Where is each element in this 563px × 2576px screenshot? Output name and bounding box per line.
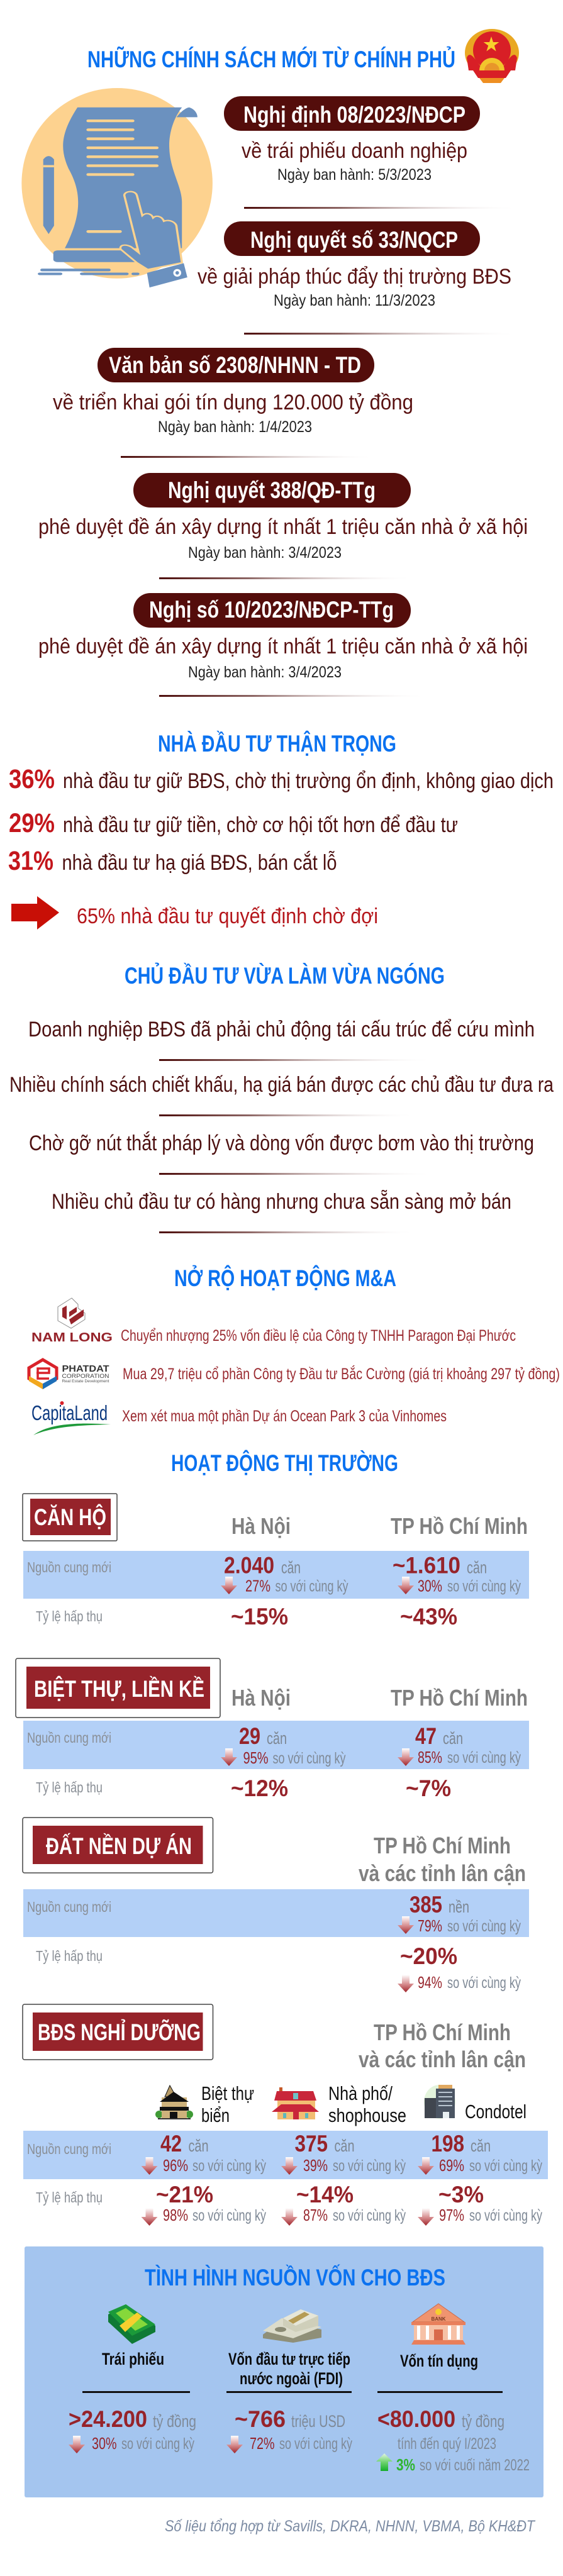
- panel: villas and townhouses: ~7%: [406, 1775, 451, 1801]
- panel: resort property: căn: [335, 2136, 355, 2155]
- panel: resort property: ~14%: [296, 2182, 354, 2207]
- panel: resort property: 97%: [439, 2206, 464, 2224]
- panel: resort property: ~3%: [438, 2182, 484, 2207]
- logo: Nam Long: NAM LONG: [31, 1331, 113, 1345]
- panel: project land: Nguồn cung mới: [27, 1899, 111, 1915]
- icon: beach villa: [155, 2085, 193, 2119]
- policy: decree 08/2023: Ngày ban hành: 5/3/2023: [277, 166, 432, 184]
- column: credit: [376, 2351, 530, 2474]
- panel: apartments: Nguồn cung mới: [27, 1559, 111, 1575]
- policy: decree 10/2023: Nghị số 10/2023/NĐCP-TTg: [149, 597, 394, 623]
- label: condotel: Condotel: [465, 2101, 527, 2123]
- panel: resort property: 87%: [303, 2206, 328, 2224]
- panel: apartments: so với cùng kỳ: [276, 1577, 348, 1595]
- heading: cautious investors: NHÀ ĐẦU TƯ THẬN TRỌNG: [158, 730, 396, 757]
- panel: resort property: so với cùng kỳ: [333, 2157, 406, 2175]
- policy: decree 08/2023: về trái phiếu doanh nghiệp: [242, 139, 467, 163]
- panel: villas and townhouses: Tỷ lệ hấp thụ: [36, 1779, 103, 1796]
- panel: apartments: 2.040: [224, 1552, 274, 1579]
- column: FDI: so với cùng kỳ: [279, 2435, 352, 2453]
- column: bonds: Trái phiếu: [102, 2350, 164, 2368]
- panel: project land: 79%: [418, 1916, 442, 1935]
- panel: apartments: Tỷ lệ hấp thụ: [36, 1608, 103, 1624]
- icon: green banknotes: [108, 2304, 155, 2344]
- column: credit: Vốn tín dụng: [400, 2351, 478, 2370]
- heading: capital sources: TÌNH HÌNH NGUỒN VỐN CHO BĐS: [145, 2264, 445, 2290]
- panel: project land: 94%: [418, 1973, 442, 1992]
- panel: resort property: so với cùng kỳ: [333, 2207, 406, 2224]
- panel: apartments: so với cùng kỳ: [447, 1577, 521, 1595]
- panel: villas and townhouses: Hà Nội: [231, 1685, 291, 1711]
- panel: project land: nền: [449, 1897, 469, 1916]
- column: FDI: [226, 2350, 352, 2453]
- policy: document 2308: [53, 348, 413, 436]
- panel: resort property: 39%: [303, 2156, 328, 2175]
- panel: resort property: 42: [160, 2131, 182, 2157]
- policy: resolution 388: [38, 473, 528, 562]
- panel: resort property: 96%: [163, 2156, 188, 2175]
- arrow: conclusion: [11, 896, 59, 930]
- panel: villas and townhouses: Nguồn cung mới: [27, 1729, 111, 1746]
- stat: 29 percent: 29%: [9, 808, 55, 838]
- logo: Phat Dat: [29, 1360, 109, 1389]
- logo: Phat Dat: PHATDAT: [62, 1363, 109, 1374]
- panel: resort property: ~21%: [156, 2182, 213, 2207]
- stat: 29 percent: nhà đầu tư giữ tiền, chờ cơ hội tốt hơn để đầu tư: [63, 813, 458, 837]
- panel: project land: [23, 1818, 529, 1992]
- policy: resolution 33: về giải pháp thúc đẩy thị trường BĐS: [198, 265, 511, 289]
- section: developers: [9, 962, 554, 1233]
- icon: townhouse: [272, 2087, 319, 2119]
- policy: resolution 388: Nghị quyết 388/QĐ-TTg: [168, 477, 376, 503]
- panel: apartments: căn: [467, 1558, 487, 1577]
- section: government policies: [21, 29, 528, 697]
- panel: villas and townhouses: căn: [267, 1729, 287, 1748]
- column: FDI: Vốn đầu tư trực tiếp: [228, 2350, 350, 2368]
- panel: apartments: ~1.610: [393, 1552, 460, 1579]
- column: credit: <80.000: [377, 2406, 455, 2432]
- panel: apartments: 30%: [418, 1576, 442, 1595]
- panel: resort property: 69%: [439, 2156, 464, 2175]
- stat: 31 percent: 31%: [8, 846, 53, 876]
- icon: condotel: [424, 2085, 455, 2119]
- logo: Phat Dat: CORPORATION: [62, 1373, 109, 1379]
- icon: document with hand and pencil: [21, 88, 213, 287]
- panel: apartments: ~15%: [231, 1604, 288, 1629]
- panel: project land: 385: [410, 1892, 442, 1918]
- panel: resort property: TP Hồ Chí Minh: [374, 2019, 511, 2045]
- column: FDI: 72%: [250, 2434, 274, 2453]
- stat: 36 percent: 36%: [9, 764, 55, 794]
- policy: resolution 388: Ngày ban hành: 3/4/2023: [188, 544, 342, 562]
- policy: decree 10/2023: [38, 593, 528, 681]
- heading: developers: CHỦ ĐẦU TƯ VỪA LÀM VỪA NGÓNG: [125, 962, 445, 989]
- panel: resort property: [23, 2004, 548, 2226]
- panel: villas and townhouses: 95%: [243, 1748, 268, 1767]
- section: M&A: [29, 1265, 560, 1435]
- column: credit: tính đến quý I/2023: [398, 2435, 496, 2453]
- label: beach villa: biển: [201, 2104, 230, 2126]
- stat: 31 percent: nhà đầu tư hạ giá BĐS, bán cắt lỗ: [62, 851, 337, 875]
- panel: resort property: 98%: [163, 2206, 188, 2224]
- label: beach villa: [201, 2082, 254, 2126]
- icon: national emblem: [465, 29, 519, 83]
- logo: CapitaLand: [31, 1401, 111, 1435]
- panel: capital sources: [25, 2246, 543, 2497]
- policy: document 2308: về triển khai gói tín dụng 120.000 tỷ đồng: [53, 391, 413, 414]
- panel: villas and townhouses: 85%: [418, 1748, 442, 1767]
- panel: project land: ~20%: [400, 1943, 457, 1969]
- label: townhouse: shophouse: [328, 2104, 406, 2126]
- section: cautious investors: [8, 730, 554, 930]
- label: townhouse: Nhà phố/: [328, 2082, 393, 2104]
- panel: resort property: Nguồn cung mới: [27, 2141, 111, 2157]
- policy: document 2308: Ngày ban hành: 1/4/2023: [158, 418, 312, 436]
- policy: decree 10/2023: Ngày ban hành: 3/4/2023: [188, 663, 342, 681]
- logo: CapitaLand: CapitaLand: [31, 1401, 108, 1424]
- column: FDI: triệu USD: [291, 2412, 345, 2431]
- panel: villas and townhouses: căn: [443, 1729, 463, 1748]
- panel: villas and townhouses: 29: [239, 1723, 260, 1749]
- panel: resort property: 375: [294, 2131, 328, 2157]
- heading: market activity: HOẠT ĐỘNG THỊ TRƯỜNG: [171, 1450, 398, 1476]
- column: bonds: so với cùng kỳ: [121, 2435, 194, 2453]
- panel: resort property: so với cùng kỳ: [192, 2157, 266, 2175]
- panel: resort property: căn: [189, 2136, 209, 2155]
- panel: apartments: Hà Nội: [231, 1513, 291, 1539]
- panel: resort property: so với cùng kỳ: [192, 2207, 266, 2224]
- policy: resolution 33: Nghị quyết số 33/NQCP: [250, 227, 458, 253]
- logo: Phat Dat: Real Estate Development: [62, 1380, 109, 1384]
- panel: project land: Tỷ lệ hấp thụ: [36, 1948, 103, 1964]
- column: bonds: [69, 2350, 196, 2453]
- text: CapitaLand deal: Xem xét mua một phần Dự án Ocean Park 3 của Vinhomes: [122, 1407, 447, 1425]
- stat: 29 percent: [9, 808, 458, 838]
- panel: resort property: 198: [432, 2131, 464, 2157]
- panel: apartments: ~43%: [400, 1604, 457, 1629]
- policy: resolution 33: Ngày ban hành: 11/3/2023: [274, 292, 435, 309]
- panel: resort property: và các tỉnh lân cận: [359, 2046, 526, 2072]
- label: townhouse: [328, 2082, 406, 2126]
- panel: villas and townhouses: so với cùng kỳ: [273, 1750, 346, 1767]
- column: bonds: 30%: [92, 2434, 117, 2453]
- column: FDI: ~766: [235, 2406, 286, 2432]
- panel: resort property: Tỷ lệ hấp thụ: [36, 2189, 103, 2206]
- heading: M&A: NỞ RỘ HOẠT ĐỘNG M&A: [174, 1265, 396, 1291]
- stat: 31 percent: [8, 846, 337, 876]
- icon: bank: BANK: [431, 2316, 446, 2322]
- icon: bank: [411, 2304, 465, 2345]
- panel: villas and townhouses: BIỆT THỰ, LIỀN KỀ: [34, 1675, 204, 1702]
- panel: apartments: 27%: [245, 1576, 270, 1595]
- callout: 65 percent wait: 65% nhà đầu tư quyết định chờ đợi: [77, 904, 378, 928]
- logo: Nam Long: [31, 1298, 113, 1345]
- panel: villas and townhouses: [16, 1658, 529, 1801]
- panel: villas and townhouses: 47: [415, 1723, 437, 1749]
- column: bonds: tỷ đồng: [153, 2412, 196, 2431]
- policy: decree 08/2023: [224, 96, 480, 184]
- panel: apartments: CĂN HỘ: [34, 1504, 106, 1530]
- panel: project land: TP Hồ Chí Minh: [374, 1833, 511, 1858]
- panel: project land: ĐẤT NỀN DỰ ÁN: [46, 1833, 192, 1859]
- panel: resort property: căn: [471, 2136, 491, 2155]
- column: bonds: >24.200: [69, 2406, 147, 2432]
- panel: villas and townhouses: TP Hồ Chí Minh: [391, 1685, 528, 1711]
- panel: resort property: BĐS NGHỈ DƯỠNG: [38, 2019, 201, 2045]
- panel: apartments: căn: [281, 1558, 301, 1577]
- panel: villas and townhouses: ~12%: [231, 1775, 288, 1801]
- panel: villas and townhouses: so với cùng kỳ: [447, 1749, 521, 1767]
- label: beach villa: Biệt thự: [201, 2082, 254, 2104]
- column: FDI: nước ngoài (FDI): [240, 2369, 343, 2388]
- policy: resolution 33: [198, 221, 511, 309]
- panel: project land: so với cùng kỳ: [447, 1918, 521, 1935]
- panel: apartments: TP Hồ Chí Minh: [391, 1513, 528, 1539]
- policy: decree 08/2023: Nghị định 08/2023/NĐCP: [243, 102, 465, 128]
- panel: project land: so với cùng kỳ: [447, 1974, 521, 1992]
- icon: dollar stacks: [263, 2309, 321, 2343]
- panel: apartments: [23, 1494, 529, 1629]
- column: credit: 3%: [396, 2455, 415, 2474]
- column: credit: tỷ đồng: [462, 2412, 504, 2431]
- panel: project land: và các tỉnh lân cận: [359, 1860, 526, 1886]
- heading: new government policies: NHỮNG CHÍNH SÁCH MỚI TỪ CHÍNH PHỦ: [87, 46, 455, 72]
- policy: document 2308: Văn bản số 2308/NHNN - TD: [109, 352, 361, 378]
